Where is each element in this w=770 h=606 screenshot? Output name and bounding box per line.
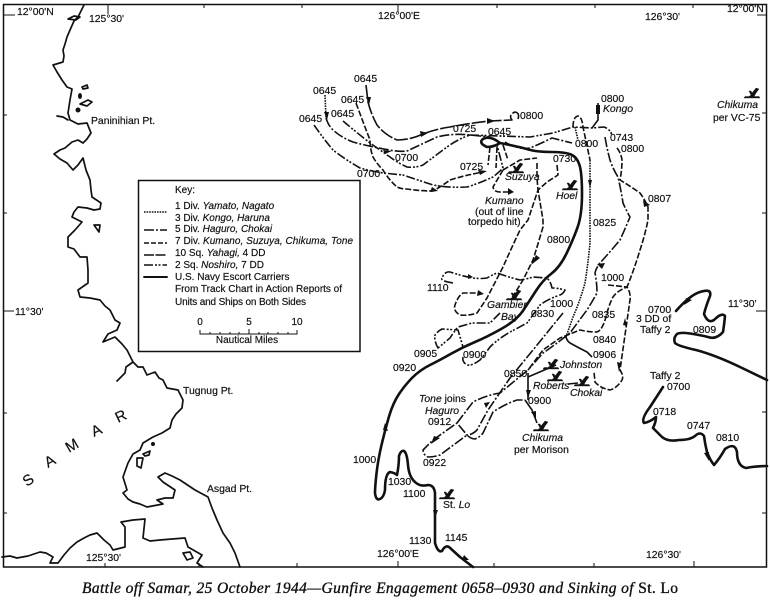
- place labels and coordinates: 11°30': [728, 299, 756, 310]
- U.S. escort carrier track: [375, 138, 582, 567]
- time labels: 0807: [648, 194, 671, 205]
- key panel: 1 Div. Yamato, Nagato: [175, 201, 275, 212]
- time labels: 0920: [393, 363, 416, 374]
- time labels: 0645: [341, 95, 364, 106]
- time labels: 0800: [621, 144, 644, 155]
- time labels: 1030: [388, 477, 411, 488]
- ship and unit labels: Chikuma: [717, 100, 758, 111]
- key panel: 3 Div. Kongo, Haruna: [175, 213, 270, 224]
- key panel: Nautical Miles: [216, 335, 278, 346]
- time labels: 0743: [610, 133, 633, 144]
- time labels: 0700: [395, 153, 418, 164]
- place labels and coordinates: 126°30': [646, 550, 681, 561]
- Taffy 2 carrier track: [643, 387, 767, 468]
- Taffy 2 destroyer track: [674, 291, 767, 380]
- ship and unit labels: Johnston: [559, 360, 602, 371]
- time labels: 0700: [648, 305, 671, 316]
- ship and unit labels: [419, 100, 761, 511]
- key panel: 0: [197, 317, 203, 328]
- ship and unit labels: Bay: [501, 312, 520, 323]
- ship and unit labels: Kumano: [485, 196, 524, 207]
- ship and unit labels: Tone joins: [419, 394, 466, 405]
- key panel: U.S. Navy Escort Carriers: [175, 272, 289, 283]
- Samar island name: S: [20, 471, 37, 490]
- time labels: 0645: [299, 114, 322, 125]
- time labels: 0830: [531, 309, 554, 320]
- ship and unit labels: (out of line: [475, 207, 524, 218]
- time labels: 0900: [463, 350, 486, 361]
- time labels: 0809: [693, 325, 716, 336]
- time labels: 0645: [354, 74, 377, 85]
- ship and unit labels: Kongo: [603, 104, 633, 115]
- time labels: 0800: [601, 94, 624, 105]
- time labels: 0645: [331, 109, 354, 120]
- time labels: 0700: [667, 382, 690, 393]
- time labels: 0800: [520, 111, 543, 122]
- time labels: 0747: [687, 421, 710, 432]
- ship and unit labels: Suzuya: [505, 172, 540, 183]
- key panel: Units and Ships on Both Sides: [175, 297, 306, 308]
- time labels: 0840: [593, 335, 616, 346]
- Samar island name: M: [62, 435, 82, 456]
- key panel: 5 Div. Haguro, Chokai: [175, 224, 273, 235]
- time labels: 0905: [414, 349, 437, 360]
- caption: Battle off Samar, 25 October 1944—Gunfire Engagement 0658–0930 and Sinking of St. Lo: [82, 580, 678, 597]
- time labels: 0800: [575, 139, 598, 150]
- ship and unit labels: Roberts: [533, 381, 569, 392]
- time labels: 1100: [403, 489, 426, 500]
- time labels: 1000: [353, 455, 376, 466]
- time labels: 1130: [409, 536, 432, 547]
- time labels: 0912: [428, 417, 451, 428]
- time labels: 0835: [592, 310, 615, 321]
- key panel: 5: [246, 317, 252, 328]
- ship and unit labels: Chokai: [570, 388, 603, 399]
- key panel: 10: [291, 317, 303, 328]
- Samar coastline: [2, 5, 240, 567]
- Samar island name: A: [42, 452, 59, 471]
- place labels and coordinates: 126°00'E: [377, 549, 419, 560]
- time labels: 0645: [313, 86, 336, 97]
- time labels: 0800: [547, 235, 570, 246]
- time labels: 0850: [504, 369, 527, 380]
- Japanese tracks centre: [423, 163, 578, 457]
- ship and unit labels: per VC-75: [713, 113, 761, 124]
- time labels: 1000: [601, 273, 624, 284]
- Samar island name: A: [89, 421, 105, 441]
- key panel: [138, 180, 360, 352]
- time labels: 0810: [716, 433, 739, 444]
- ship and unit labels: Gambier: [487, 300, 527, 311]
- ship and unit labels: torpedo hit): [468, 217, 521, 228]
- time labels: 0922: [423, 458, 446, 469]
- place labels and coordinates: 11°30': [15, 307, 43, 318]
- Samar island name: R: [113, 407, 130, 427]
- ship and unit labels: Haguro: [425, 406, 459, 417]
- ship and unit labels: 3 DD of: [636, 314, 671, 325]
- place labels and coordinates: Paninihian Pt.: [91, 116, 155, 127]
- key panel: 2 Sq. Noshiro, 7 DD: [175, 260, 264, 271]
- place labels and coordinates: 125°30': [86, 553, 121, 564]
- place labels and coordinates: 12°00'N: [17, 7, 54, 18]
- time labels: 1145: [445, 533, 468, 544]
- ship and unit labels: per Morison: [514, 445, 569, 456]
- time labels: 0906: [593, 350, 616, 361]
- time labels: 0725: [453, 124, 476, 135]
- Japanese tracks north: [314, 85, 612, 192]
- ship and unit labels: Taffy 2: [650, 371, 681, 382]
- time labels: 0900: [528, 396, 551, 407]
- time labels: 0700: [357, 169, 380, 180]
- key panel: Key:: [175, 185, 195, 196]
- ship and unit labels: Hoel: [556, 191, 578, 202]
- place labels and coordinates: 125°30': [89, 14, 124, 25]
- place labels and coordinates: 126°30': [645, 12, 680, 23]
- ship icons: sunk vessels: [439, 88, 760, 499]
- time labels: 0725: [460, 162, 483, 173]
- key panel: 10 Sq. Yahagi, 4 DD: [175, 248, 265, 259]
- ship and unit labels: Taffy 2: [640, 325, 671, 336]
- place labels and coordinates: 12°00'N: [727, 4, 764, 15]
- track arrowheads: [324, 97, 709, 560]
- time labels: 0730: [553, 154, 576, 165]
- time labels: 0718: [653, 407, 676, 418]
- time labels: 0645: [488, 127, 511, 138]
- place labels and coordinates: Tugnug Pt.: [183, 386, 233, 397]
- place labels and coordinates: Asgad Pt.: [207, 484, 252, 495]
- ship and unit labels: Chikuma: [522, 433, 563, 444]
- time labels: 1000: [550, 299, 573, 310]
- Samar island name: [20, 407, 130, 490]
- ship and unit labels: St. Lo: [443, 500, 470, 511]
- key panel: 7 Div. Kumano, Suzuya, Chikuma, Tone: [175, 236, 353, 247]
- time labels: 0825: [593, 218, 616, 229]
- Japanese tracks east: [528, 137, 648, 390]
- key panel: From Track Chart in Action Reports of: [175, 284, 342, 295]
- time labels: [299, 74, 739, 547]
- time labels: 1110: [427, 283, 449, 294]
- place labels and coordinates: 126°00'E: [378, 11, 420, 22]
